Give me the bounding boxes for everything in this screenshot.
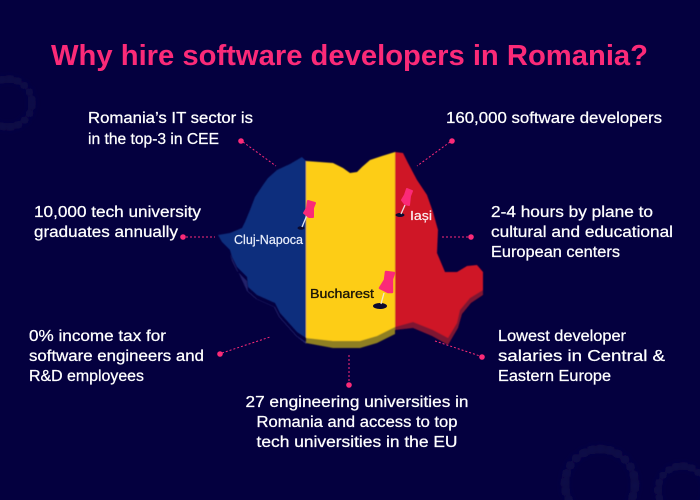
- text: income tax: software engineers and: [29, 348, 204, 365]
- pin: Iasi: [396, 189, 412, 217]
- flag stripes: [218, 151, 484, 342]
- connector: developers count: [417, 138, 455, 166]
- city label: Iasi: Iași: [410, 208, 432, 223]
- connector: salaries: [435, 341, 485, 360]
- yellow edge: [306, 326, 395, 348]
- connector: IT sector: [238, 138, 276, 166]
- pin: Bucharest: [373, 272, 394, 309]
- text: universities: tech universities in the EU: [256, 434, 458, 451]
- text: salaries: Eastern Europe: [498, 368, 611, 385]
- red edge: [395, 289, 483, 345]
- connector: universities: [346, 355, 352, 388]
- text: income tax: [29, 328, 204, 385]
- text: income tax: 0% income tax for: [29, 328, 166, 345]
- text: flight times: European centers: [491, 244, 620, 261]
- text: universities: 27 engineering universities in: [246, 394, 468, 411]
- text: graduates: [34, 204, 201, 241]
- text: salaries: salaries in Central &: [498, 348, 666, 365]
- map extruded edge: [230, 254, 306, 344]
- city label: Bucharest: Bucharest: [310, 286, 374, 301]
- text: salaries: [498, 328, 666, 385]
- text: IT sector: Romania’s IT sector is: [88, 110, 253, 127]
- text: universities: [246, 394, 468, 451]
- text: developers count: 160,000 software developers: [446, 110, 662, 127]
- title: Why hire software developers in Romania?: [51, 40, 648, 72]
- text: income tax: R&D employees: [29, 368, 144, 385]
- city label: Cluj-Napoca: Cluj-Napoca: [234, 233, 303, 247]
- text: universities: Romania and access to top: [256, 414, 458, 431]
- text: graduates: 10,000 tech university: [34, 204, 201, 221]
- text: graduates: graduates annually: [34, 224, 178, 241]
- text: salaries: Lowest developer: [498, 328, 626, 345]
- text: flight times: cultural and educational: [491, 224, 673, 241]
- background gear: bottom right: [658, 466, 700, 500]
- text: IT sector: in the top-3 in CEE: [88, 131, 219, 148]
- pin: Cluj-Napoca: [298, 201, 315, 230]
- text: flight times: [491, 204, 673, 261]
- connector: flight times: [442, 234, 474, 240]
- text: flight times: 2-4 hours by plane to: [491, 204, 653, 221]
- map of Romania: [218, 151, 484, 349]
- background gear: bottom centre: [565, 449, 635, 500]
- connector: graduates: [180, 234, 215, 240]
- background gear: left: [0, 79, 32, 127]
- connector: income tax: [217, 337, 270, 357]
- text: IT sector: [88, 110, 253, 148]
